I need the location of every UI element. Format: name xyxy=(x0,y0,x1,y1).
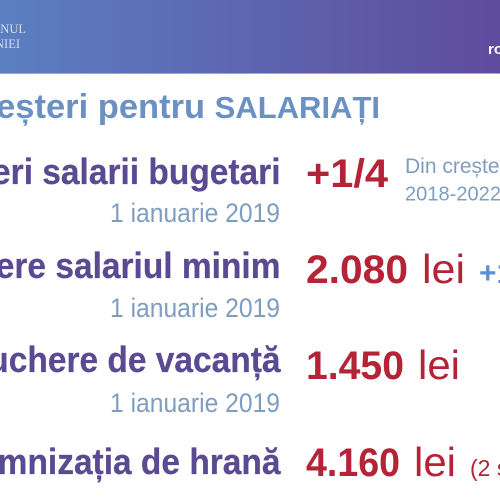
note: din creștere xyxy=(405,155,500,206)
row: salarii bugetari xyxy=(0,152,500,228)
value: 4.160 lei xyxy=(306,439,456,485)
row: vouchere de vacanță xyxy=(0,340,460,418)
value: 2.080 lei xyxy=(306,246,465,292)
header logo text xyxy=(0,22,26,51)
date: salariul minim: 1 ianuarie 2019 xyxy=(110,293,280,323)
value: 4.160 lei: lei xyxy=(414,439,456,485)
value: one quarter: +1/4 xyxy=(306,152,389,196)
date: vouchere: 1 ianuarie 2019 xyxy=(110,388,280,418)
value: 4.160 lei: 4.160 xyxy=(306,441,400,485)
header banner xyxy=(0,0,500,74)
value: 1.450 lei: 1.450 xyxy=(306,344,404,388)
row: salariul minim xyxy=(0,246,500,323)
value: 2.080 lei: 2.080 xyxy=(306,248,408,292)
date: salarii bugetari: 1 ianuarie 2019 xyxy=(110,198,280,228)
value: 2.080 lei: lei xyxy=(422,246,465,292)
row: indemnizația de hrană xyxy=(0,439,500,485)
value: 1.450 lei: lei xyxy=(418,342,460,388)
value: 1.450 lei xyxy=(306,342,460,388)
